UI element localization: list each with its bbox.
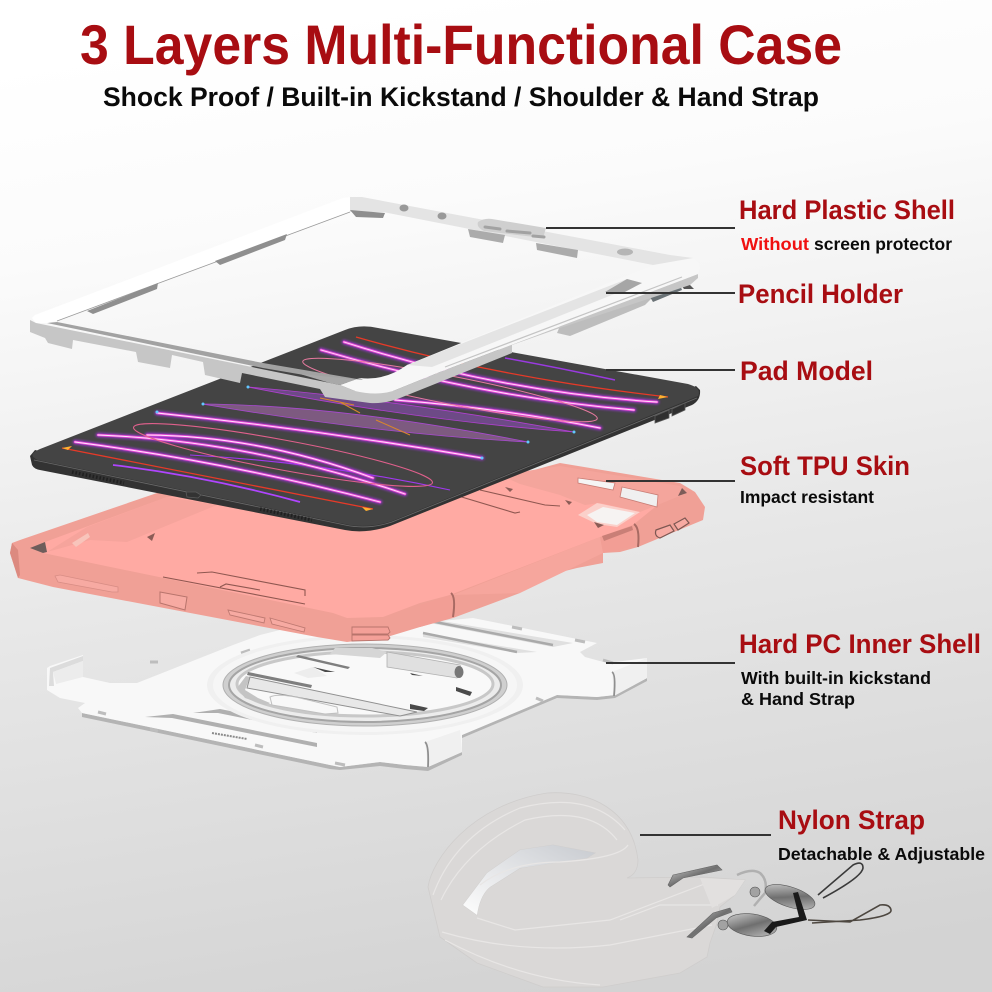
label: hard plastic shell: Hard Plastic Shell [739,195,955,225]
metal buckles [668,865,722,887]
label: nylon strap: Detachable & Adjustable [778,844,985,864]
left tab inner [49,656,83,686]
notch lines [163,490,560,604]
fine-line bundles [202,404,528,442]
ring inner wall [330,648,387,658]
pad edge [30,386,700,531]
shell edge thickness [47,678,647,771]
shell plate [47,618,647,767]
loop curves [131,413,435,497]
top band [350,197,693,265]
white core layer [75,342,657,502]
label: nylon strap: Nylon Strap [778,805,925,835]
back wall [500,466,687,512]
layer: nylon strap [428,793,891,987]
label: pad model: Pad Model [740,356,873,386]
outer rim [10,460,705,642]
fine violet streaks [113,465,300,502]
label: hard plastic shell [739,195,955,254]
title: 3 Layers Multi-Functional Case [80,13,842,76]
right rim band [420,595,453,627]
red streaks [62,448,373,509]
label: soft TPU skin [740,451,910,507]
label: nylon strap [778,805,985,864]
left inner wall [30,542,47,553]
openings [578,478,615,490]
leader lines [546,228,771,835]
clip under right arm [557,296,652,336]
side buttons [650,285,682,302]
mic and sensor holes [400,204,408,212]
edge marks [212,733,247,739]
label: pencil holder: Pencil Holder [738,279,903,309]
black cord ties [764,892,807,934]
label: hard PC inner shell: & Hand Strap [741,689,855,709]
snap hooks [762,879,818,915]
rim line [445,277,682,367]
subtitle: Shock Proof / Built-in Kickstand / Shoulder & Hand Strap [103,82,819,112]
floor [30,478,660,618]
rotating ring [207,635,523,735]
label: soft TPU skin: Soft TPU Skin [740,451,910,481]
pink streak layer [75,342,657,502]
right arm and corner face [340,258,700,394]
label: hard plastic shell: Without [741,234,809,254]
small details [313,667,472,711]
pencil holder groove [407,279,642,367]
volume buttons [656,525,674,538]
screen wallpaper swooshes [62,337,668,511]
label: hard PC inner shell [739,629,981,709]
label: hard PC inner shell: With built-in kickstand [741,668,931,688]
strap band [428,793,745,987]
grip pad [270,695,338,714]
bottom corner wedge [300,374,363,385]
pad screen [32,326,699,526]
left arm white band [32,197,351,323]
webbing stitch lines [433,802,718,985]
layer: soft TPU skin [10,460,705,642]
inner clips [350,210,385,218]
label: hard PC inner shell: Hard PC Inner Shell [739,629,981,659]
corner protector left [10,543,20,578]
label: soft TPU skin: Impact resistant [740,487,874,507]
outer side wall with clips [30,274,698,403]
wrist loops [818,863,863,898]
hinge roll [387,652,463,678]
speaker grilles and ports [72,472,312,520]
kickstand bar [247,677,417,716]
bottom rim details [55,575,118,592]
gray stripe along bottom arm [47,322,363,385]
camera cut-out [478,219,546,238]
right tabs [612,658,647,696]
layer: hard PC inner shell [47,618,647,771]
strap opening [463,845,595,915]
layer: pad model [30,326,700,531]
long slots [145,714,317,747]
label: hard plastic shell: screen protector [814,234,952,254]
layer: hard plastic shell [30,197,700,403]
